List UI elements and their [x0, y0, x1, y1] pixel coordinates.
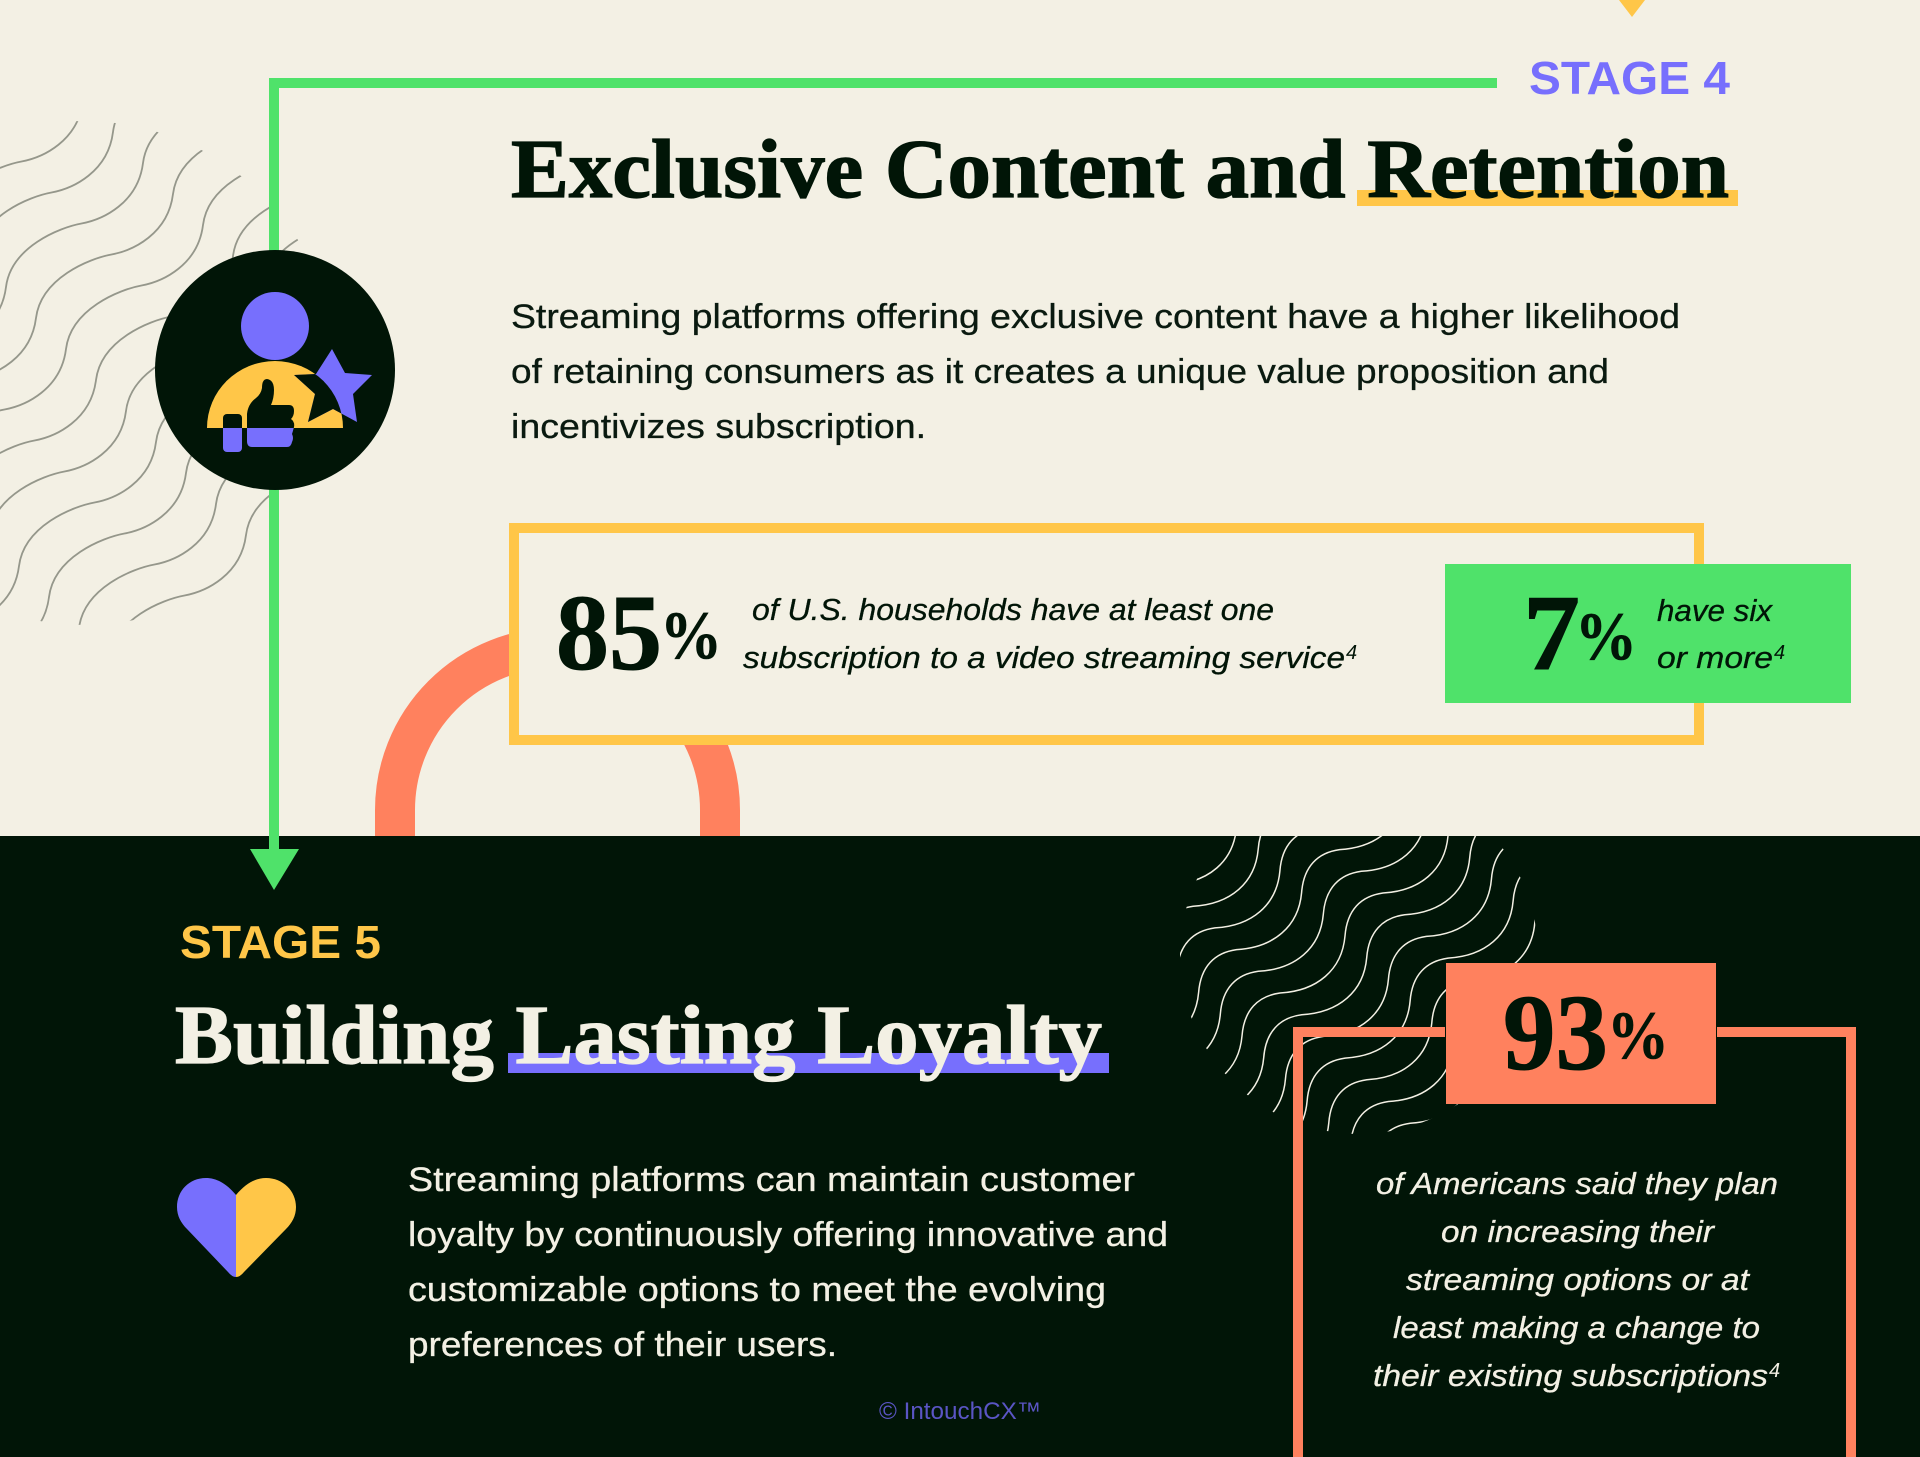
person head	[241, 292, 309, 360]
box gap	[1445, 1020, 1717, 1044]
stat description: 7 percent: or more	[1657, 640, 1773, 675]
stat: 85 percent	[556, 574, 722, 693]
stat description: 7 percent: 4	[1774, 642, 1785, 664]
stat description: 85 percent: of U.S. households have at least one	[752, 592, 1274, 627]
stat description: 85 percent	[743, 592, 1357, 675]
number 93: 93	[1503, 974, 1608, 1093]
heading: stage 5: Building Lasting Loyalty	[175, 989, 1102, 1082]
stat description: 85 percent: subscription to a video streaming service	[743, 640, 1345, 675]
highlight under Lasting Loyalty	[508, 1053, 1109, 1073]
percent sign: %	[1607, 997, 1669, 1073]
stat: 85 percent: 85	[556, 574, 662, 693]
thumbs up upper part	[223, 379, 294, 428]
icon background circle	[155, 250, 395, 490]
highlight under Retention	[1357, 190, 1738, 206]
body text: stage 5	[408, 1161, 1168, 1364]
coral box	[1446, 963, 1716, 1104]
heading: stage 4: Exclusive Content and Retention	[511, 123, 1729, 216]
stat: 85 percent: %	[660, 597, 722, 673]
stage 4 label: STAGE 4	[1529, 52, 1730, 104]
stage 5 label: STAGE 5	[180, 916, 381, 968]
star cut-out on body	[294, 374, 342, 422]
stat description: 7 percent: have six	[1657, 593, 1774, 628]
decorative wave pattern: lower right	[1180, 836, 1536, 1134]
arrow: yellow triangle from previous stage	[1619, 0, 1645, 17]
green connector line with arrow	[250, 78, 1497, 890]
background: dark lower section	[0, 836, 1920, 1457]
stat: 7 percent	[1523, 574, 1637, 693]
stat description: 93 percent: least making a change to	[1393, 1310, 1760, 1345]
body text: stage 4: of retaining consumers as it creates a unique value proposition and	[511, 353, 1609, 391]
icon: person with thumbs up and star	[155, 250, 395, 490]
stat: 7 percent: %	[1575, 598, 1637, 674]
coral frame	[1298, 1032, 1851, 1457]
icon: two-tone heart	[177, 1178, 296, 1277]
stat description: 7 percent	[1657, 593, 1785, 675]
coral arch connector	[395, 648, 720, 836]
body text: stage 4: incentivizes subscription.	[511, 408, 926, 446]
person body	[207, 361, 343, 428]
decorative wave pattern: top left	[0, 121, 298, 625]
body text: stage 5: customizable options to meet the evolving	[408, 1271, 1106, 1309]
stat description: 93 percent: their existing subscriptions	[1373, 1358, 1768, 1393]
star	[294, 349, 372, 422]
stat panel: green box	[1445, 564, 1851, 703]
background: cream upper section	[0, 0, 1920, 836]
stat box: 93 percent	[1445, 963, 1717, 1104]
stat description: 93 percent	[1373, 1166, 1780, 1393]
stat panel: yellow frame	[514, 528, 1699, 740]
body text: stage 5: preferences of their users.	[408, 1326, 837, 1364]
copyright: © IntouchCX™	[879, 1398, 1041, 1425]
stat: 7 percent: 7	[1523, 574, 1580, 693]
body text: stage 4	[511, 298, 1680, 446]
body text: stage 4: Streaming platforms offering exclusive content have a higher likelihood	[511, 298, 1680, 336]
stat description: 93 percent: 4	[1769, 1360, 1780, 1382]
stat description: 93 percent: on increasing their	[1441, 1214, 1716, 1249]
stat description: 93 percent: of Americans said they plan	[1376, 1166, 1778, 1201]
thumbs up lower part	[223, 428, 294, 452]
stat description: 85 percent: 4	[1346, 642, 1357, 664]
body text: stage 5: loyalty by continuously offering innovative and	[408, 1216, 1168, 1254]
body text: stage 5: Streaming platforms can maintain customer	[408, 1161, 1135, 1199]
stat description: 93 percent: streaming options or at	[1406, 1262, 1751, 1297]
